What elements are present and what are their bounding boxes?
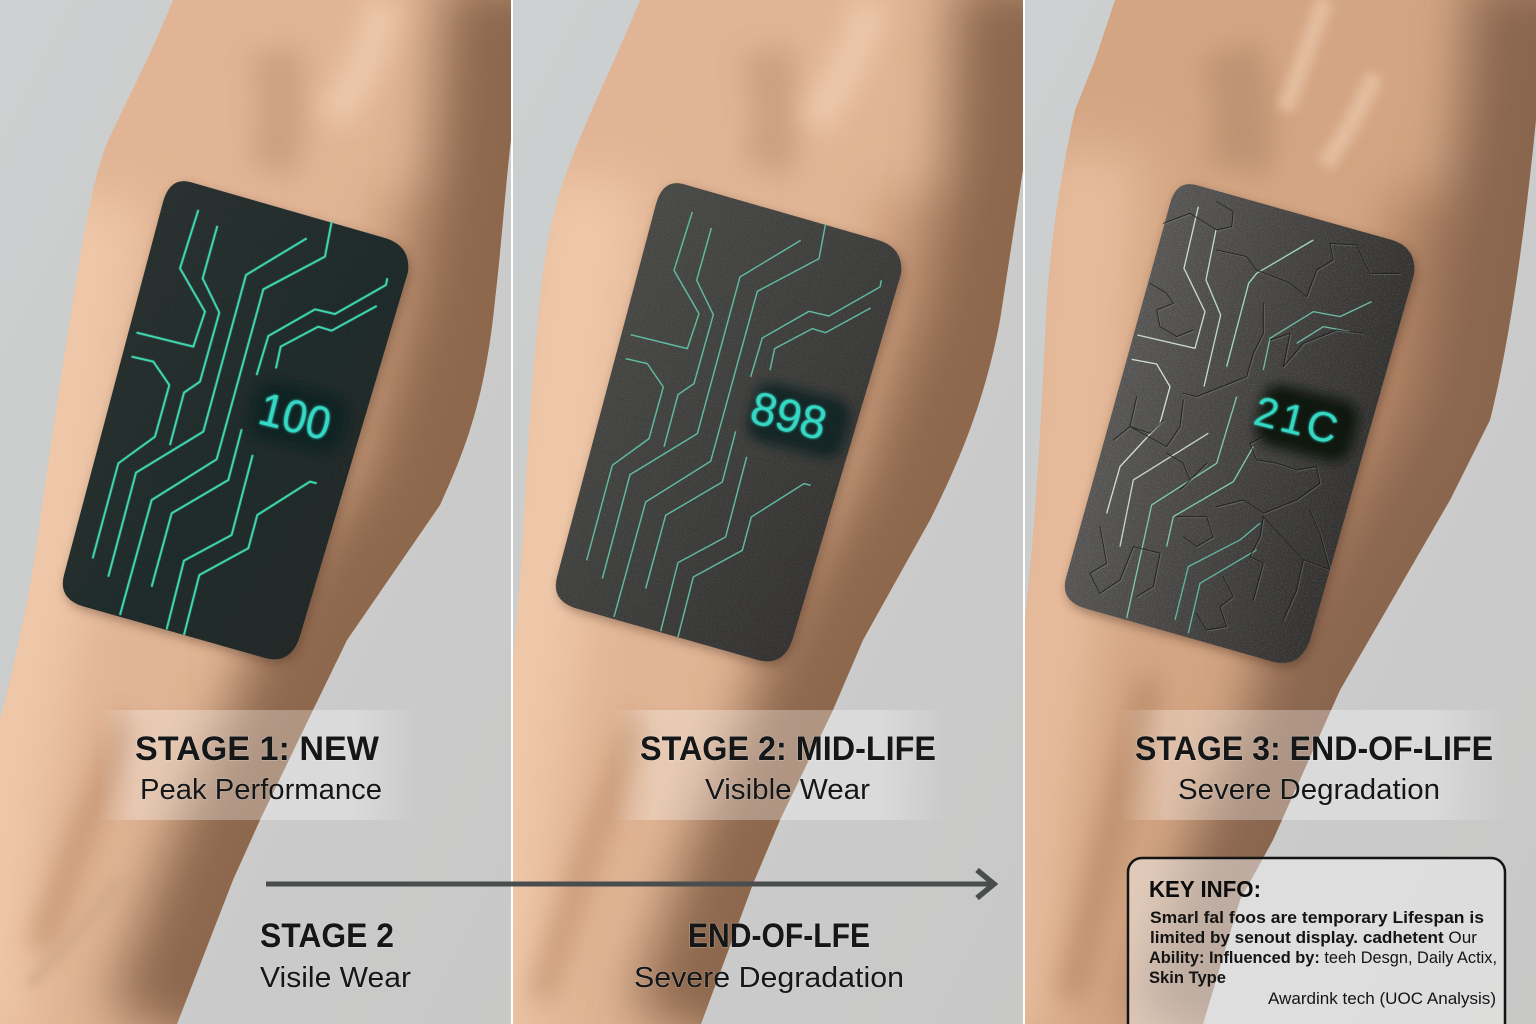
panel: stage 3 forearm photo — [1000, 0, 1536, 1024]
callout credit: Awardink tech (UOC Analysis) — [1268, 989, 1496, 1008]
heading: stage 2: STAGE 2: MID-LIFE — [640, 730, 936, 768]
heading: stage 1: STAGE 1: NEW — [135, 730, 380, 768]
stage 3 label band — [1118, 710, 1508, 820]
subheading: stage 2: Visible Wear — [705, 774, 870, 806]
display reading 898: 898 — [746, 381, 832, 450]
patch 3 shadow — [1067, 188, 1416, 667]
patch 3 leather texture — [1065, 184, 1414, 663]
lower label: stage 2: STAGE 2 — [260, 917, 394, 955]
patch 2 leather texture — [556, 183, 901, 661]
callout body: limited by senout display. cadhetent Our — [1150, 928, 1477, 947]
lower label: end of life — [634, 917, 904, 994]
patch 3 cracks — [1090, 202, 1400, 630]
stage 1 label band — [98, 710, 418, 820]
forearm 2 — [480, 0, 1040, 1024]
stage 2 label band — [612, 710, 948, 820]
panel: stage 1 patch — [63, 181, 408, 659]
heading: stage 3 — [1135, 730, 1493, 806]
callout heading: KEY INFO: — [1149, 876, 1261, 902]
arrow: timeline — [266, 870, 994, 898]
heading: stage 2 — [640, 730, 936, 806]
patch 1 circuit traces — [93, 210, 387, 635]
forearm 1 — [0, 0, 530, 1024]
display reading 100: 100 — [254, 382, 336, 450]
lower label: end of life: END-OF-LFE — [688, 917, 870, 955]
panel: stage 2 patch — [556, 183, 901, 661]
forearm 3 — [1000, 0, 1536, 1024]
display reading 21C: 21C — [1250, 387, 1343, 453]
callout body: Ability: Influenced by: teeh Desgn, Daily Actix, — [1149, 948, 1497, 967]
lower sublabel: visile wear: Visile Wear — [260, 962, 411, 994]
callout body — [1149, 908, 1497, 987]
patch 3 display — [1248, 380, 1362, 465]
callout body: Smarl fal foos are temporary Lifespan is — [1150, 908, 1484, 927]
patch 1 shadow — [65, 185, 410, 663]
patch 3 crack highlights — [1091, 203, 1401, 631]
callout body: Skin Type — [1149, 968, 1226, 987]
panel: stage 3 patch — [1065, 184, 1414, 663]
lower label: stage 2 — [260, 917, 411, 994]
patch 1 display — [246, 378, 352, 457]
callout: key info — [1128, 858, 1505, 1024]
patch 2 circuit traces — [587, 212, 881, 637]
panel: stage 2 forearm photo — [480, 0, 1040, 1024]
patch 2 shadow — [558, 187, 903, 665]
heading: stage 3: STAGE 3: END-OF-LIFE — [1135, 730, 1493, 768]
patch 3 circuit traces — [1107, 207, 1372, 633]
panel: stage 1 forearm photo — [0, 0, 530, 1024]
subheading: stage 1: Peak Performance — [140, 774, 382, 806]
lower sublabel: severe degradation: Severe Degradation — [634, 962, 904, 994]
heading: stage 1 — [135, 730, 382, 806]
patch 2 display — [744, 379, 854, 461]
subheading: stage 3: Severe Degradation — [1178, 774, 1440, 806]
patch 1 leather texture — [87, 190, 393, 656]
